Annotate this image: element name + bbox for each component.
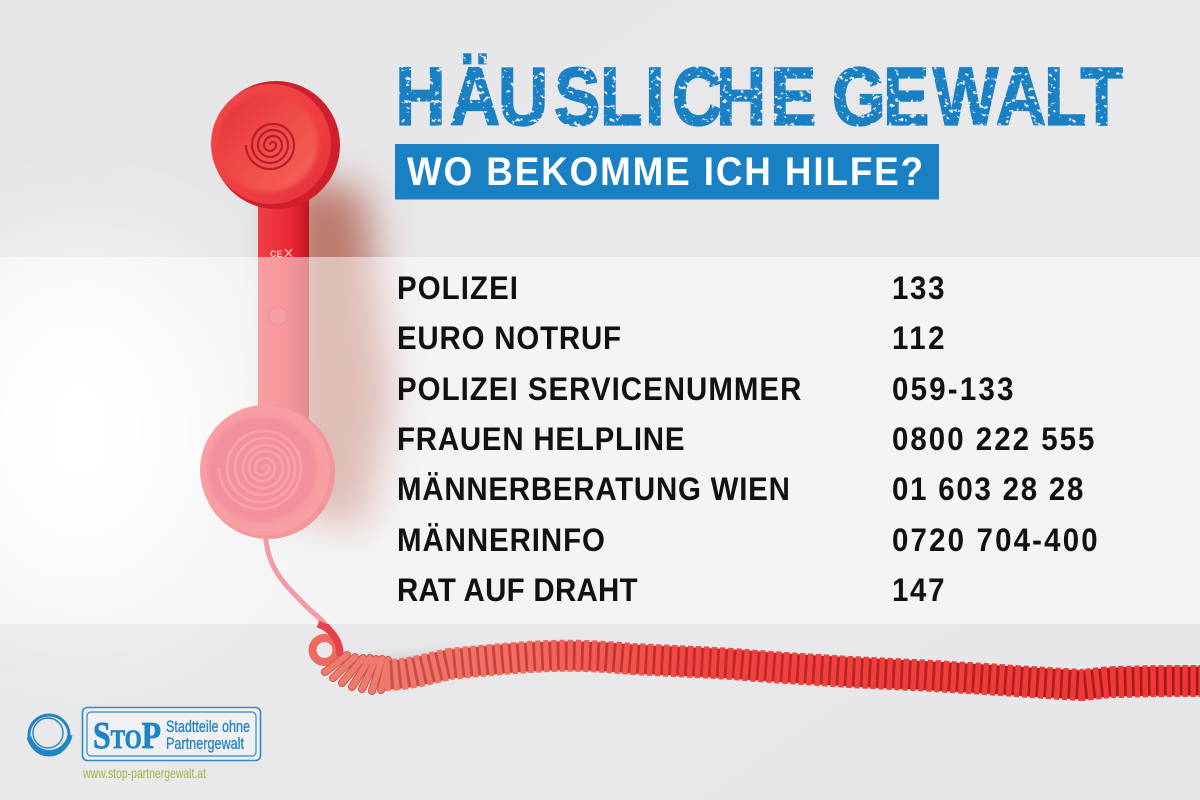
logo area <box>29 708 260 781</box>
row: Euro Notruf <box>397 320 944 356</box>
subtitle bar: WO BEKOMME ICH HILFE? <box>407 150 923 194</box>
row: Männerinfo: 0720 704-400 <box>892 522 1098 558</box>
phone shadow <box>285 175 470 682</box>
STOP logo box: Partnergewalt <box>166 734 244 753</box>
row: Männerberatung Wien: 01 603 28 28 <box>892 471 1083 507</box>
row: Euro Notruf: 112 <box>892 320 944 356</box>
row: Frauen Helpline: 0800 222 555 <box>892 421 1094 457</box>
row: Männerberatung Wien <box>397 471 1083 507</box>
mouthpiece <box>200 405 335 539</box>
row: Euro Notruf: EURO NOTRUF <box>397 320 621 356</box>
handle button <box>269 307 287 325</box>
STOP logo box: STOP <box>93 715 161 757</box>
cord loop <box>312 638 336 662</box>
coiled cord <box>312 624 1200 691</box>
CE mark <box>270 249 292 259</box>
CE mark: CE <box>270 249 283 259</box>
thin cord <box>266 540 334 634</box>
coil fan near loop <box>325 655 388 691</box>
row: Frauen Helpline: FRAUEN HELPLINE <box>397 421 685 457</box>
translucent white band <box>0 257 1200 624</box>
icon: circular ring logo <box>29 715 70 755</box>
row: Polizei: POLIZEI <box>397 270 518 306</box>
STOP logo box <box>82 708 260 760</box>
STOP logo box: Stadtteile ohne <box>166 717 250 736</box>
row: Polizei <box>397 270 944 306</box>
red telephone handset <box>200 81 340 634</box>
row: Polizei: 133 <box>892 270 944 306</box>
row: Männerinfo <box>397 522 1098 558</box>
earpiece <box>211 81 340 209</box>
title: HÄUSLICHE GEWALT <box>396 51 1123 143</box>
row: Rat auf Draht <box>397 572 944 608</box>
row: Männerinfo: MÄNNERINFO <box>397 522 605 558</box>
row: Frauen Helpline <box>397 421 1094 457</box>
row: Rat auf Draht: RAT AUF DRAHT <box>397 572 638 608</box>
website url: www.stop-partnergewalt.at <box>82 765 206 781</box>
row: Männerberatung Wien: MÄNNERBERATUNG WIEN <box>397 471 790 507</box>
row: Polizei Servicenummer: 059-133 <box>892 371 1013 407</box>
handset handle <box>258 195 309 420</box>
row: Polizei Servicenummer <box>397 371 1013 407</box>
row: Polizei Servicenummer: POLIZEI SERVICENUMMER <box>397 371 801 407</box>
helpline table <box>397 270 1098 608</box>
row: Rat auf Draht: 147 <box>892 572 944 608</box>
